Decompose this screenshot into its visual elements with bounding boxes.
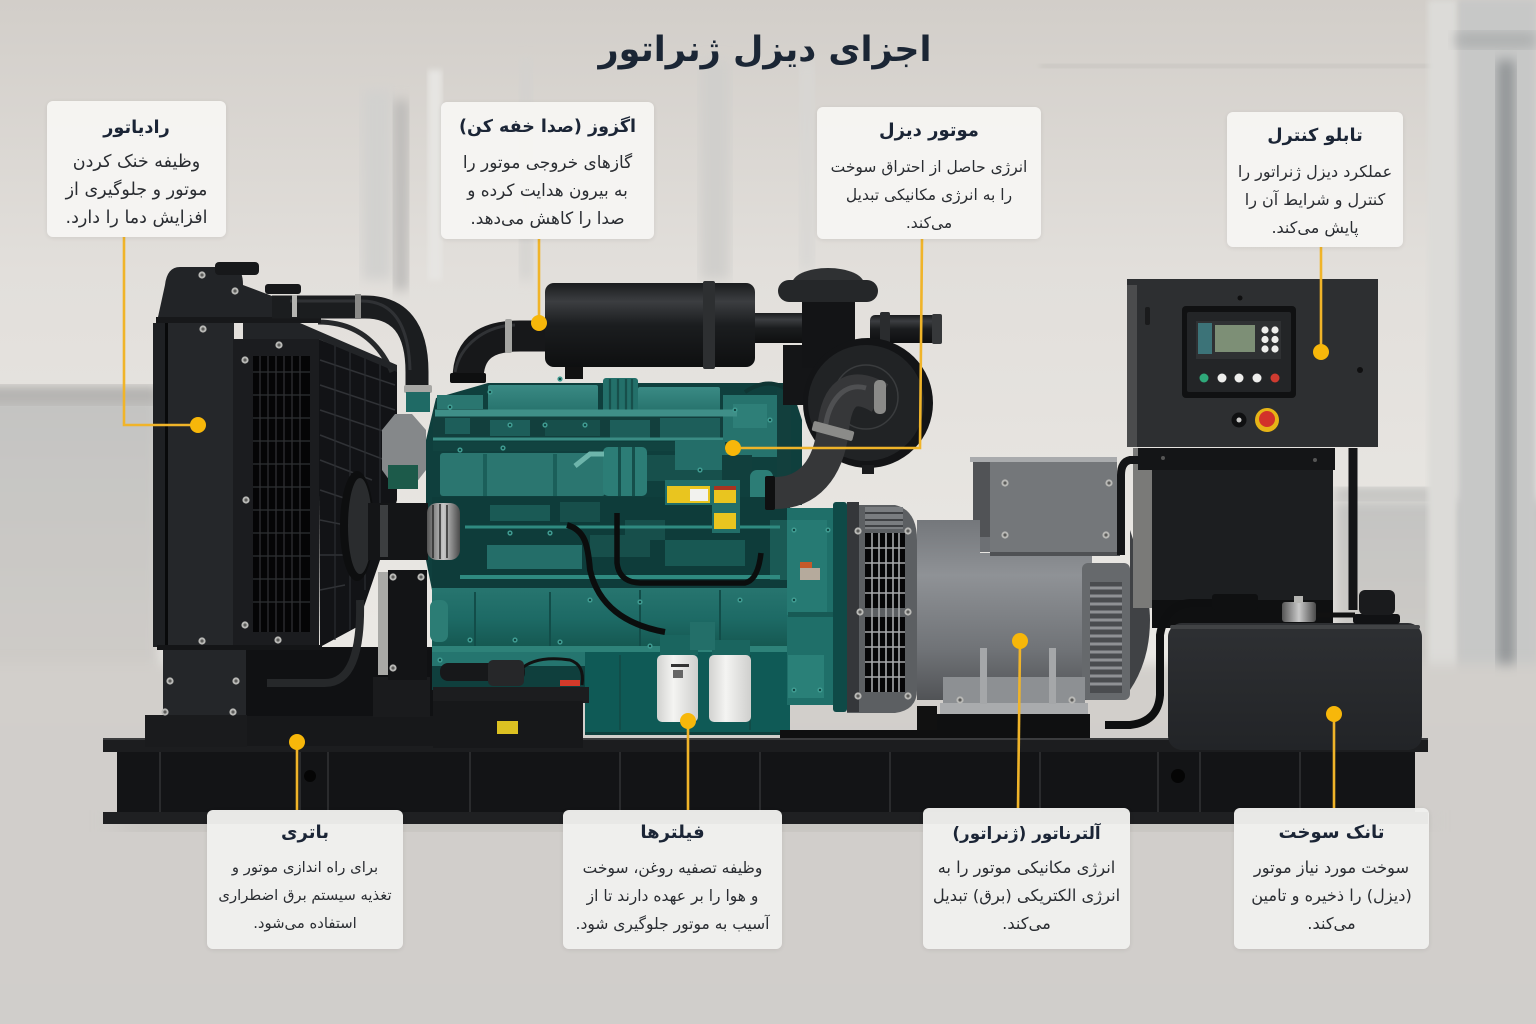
- air intake elbow: [765, 380, 886, 510]
- card: filters: آسیب به موتور جلوگیری شود.: [576, 915, 769, 933]
- leader line: battery: [289, 734, 305, 810]
- card: alternator: [923, 808, 1130, 949]
- card: battery: برای راه اندازی موتور و: [232, 859, 378, 876]
- leader line: control panel: [1313, 247, 1329, 360]
- card: diesel engine: انرژی حاصل از احتراق سوخت: [831, 158, 1027, 176]
- card: battery: باتری: [281, 822, 329, 843]
- card: control panel: پایش می‌کند.: [1271, 218, 1359, 237]
- card: alternator: می‌کند.: [1002, 914, 1051, 933]
- card: control panel: تابلو کنترل: [1267, 126, 1363, 146]
- leader line: alternator: [1012, 633, 1028, 808]
- card: filters: و هوا را بر عهده دارند تا از: [587, 887, 758, 905]
- leader line: diesel engine: [725, 239, 922, 456]
- card: control panel: کنترل و شرایط آن را: [1245, 190, 1385, 209]
- air filter and intake: [755, 268, 942, 474]
- card: radiator: موتور و جلوگیری از: [66, 180, 207, 200]
- card: battery: استفاده می‌شود.: [253, 915, 357, 932]
- card: fuel tank: می‌کند.: [1307, 914, 1356, 933]
- warning labels: [665, 480, 740, 533]
- card: filters: [563, 810, 782, 949]
- fuel cap: [1353, 590, 1400, 624]
- radiator: [153, 262, 322, 650]
- controller module: [1182, 306, 1296, 398]
- card: fuel tank: (دیزل) را ذخیره و تامین: [1251, 886, 1412, 905]
- engine hoses: [567, 525, 665, 632]
- card: fuel tank: تانک سوخت: [1278, 822, 1384, 843]
- card: battery: تغذیه سیستم برق اضطراری: [218, 887, 392, 904]
- upper rails: [433, 415, 723, 437]
- card: radiator: وظیفه خنک کردن: [73, 152, 200, 172]
- oil and fuel filters: [657, 655, 751, 722]
- card: muffler: به بیرون هدایت کرده و: [467, 180, 628, 200]
- card: battery: [207, 810, 403, 949]
- leader line: radiator: [124, 237, 206, 433]
- card: filters: فیلترها: [640, 822, 705, 843]
- fan and radiator core side: [243, 322, 397, 647]
- exhaust manifold: [440, 453, 605, 496]
- oil pan: [432, 588, 790, 650]
- key switch: [1232, 412, 1246, 428]
- card: alternator: انرژی مکانیکی موتور را به: [938, 858, 1115, 877]
- battery: [433, 680, 589, 748]
- leader line: filters: [680, 713, 696, 810]
- card: diesel engine: می‌کند.: [906, 214, 952, 232]
- card: muffler: [441, 102, 654, 239]
- card: filters: وظیفه تصفیه روغن، سوخت: [583, 859, 762, 877]
- card: muffler: گازهای خروجی موتور را: [463, 152, 632, 172]
- starter motor: [440, 659, 582, 686]
- flange: [750, 470, 773, 510]
- card: fuel tank: [1234, 808, 1429, 949]
- alternator mounting feet: [780, 648, 1090, 738]
- filler neck: [1282, 596, 1316, 622]
- turbo and pulley at engine front: [340, 414, 460, 680]
- skid base frame: [103, 738, 1428, 824]
- filter heads: [660, 635, 698, 655]
- flywheel housing: [787, 502, 847, 712]
- card: radiator: رادیاتور: [103, 118, 170, 138]
- alternator end bell, grille and body: [780, 457, 1150, 738]
- alternator front grille: [847, 502, 917, 713]
- card: muffler: اگزوز (صدا خفه کن): [459, 117, 636, 137]
- mid block: [432, 497, 787, 589]
- card: alternator: انرژی الکتریکی (برق) تبدیل: [933, 886, 1120, 905]
- card: diesel engine: [817, 107, 1041, 239]
- radiator grille: [253, 356, 310, 632]
- card: radiator: افزایش دما را دارد.: [66, 208, 207, 228]
- lower radiator support and brackets: [145, 600, 435, 747]
- leader line: fuel tank: [1326, 706, 1342, 808]
- card: diesel engine: موتور دیزل: [879, 120, 979, 141]
- valve cover: [437, 395, 483, 409]
- fuel tank: [1105, 590, 1422, 750]
- alternator terminal box: [970, 457, 1117, 552]
- card: muffler: صدا را کاهش می‌دهد.: [470, 208, 625, 228]
- muffler: [450, 281, 755, 383]
- card: control panel: عملکرد دیزل ژنراتور را: [1238, 162, 1392, 181]
- card: radiator: [47, 101, 226, 237]
- emergency stop: [1255, 408, 1279, 432]
- card: fuel tank: سوخت مورد نیاز موتور: [1254, 858, 1409, 877]
- card: alternator: آلترناتور (ژنراتور): [952, 823, 1101, 843]
- fuel hose: [1105, 603, 1215, 725]
- card: diesel engine: را به انرژی مکانیکی تبدیل: [846, 186, 1012, 204]
- card: control panel: [1227, 112, 1403, 247]
- radiator upper hose: [272, 294, 432, 412]
- control panel: [1127, 279, 1378, 447]
- leader line: muffler: [531, 239, 547, 331]
- engine block: [426, 376, 802, 735]
- title: اجزای دیزل ژنراتور: [598, 30, 931, 70]
- control panel stand: [1121, 448, 1353, 628]
